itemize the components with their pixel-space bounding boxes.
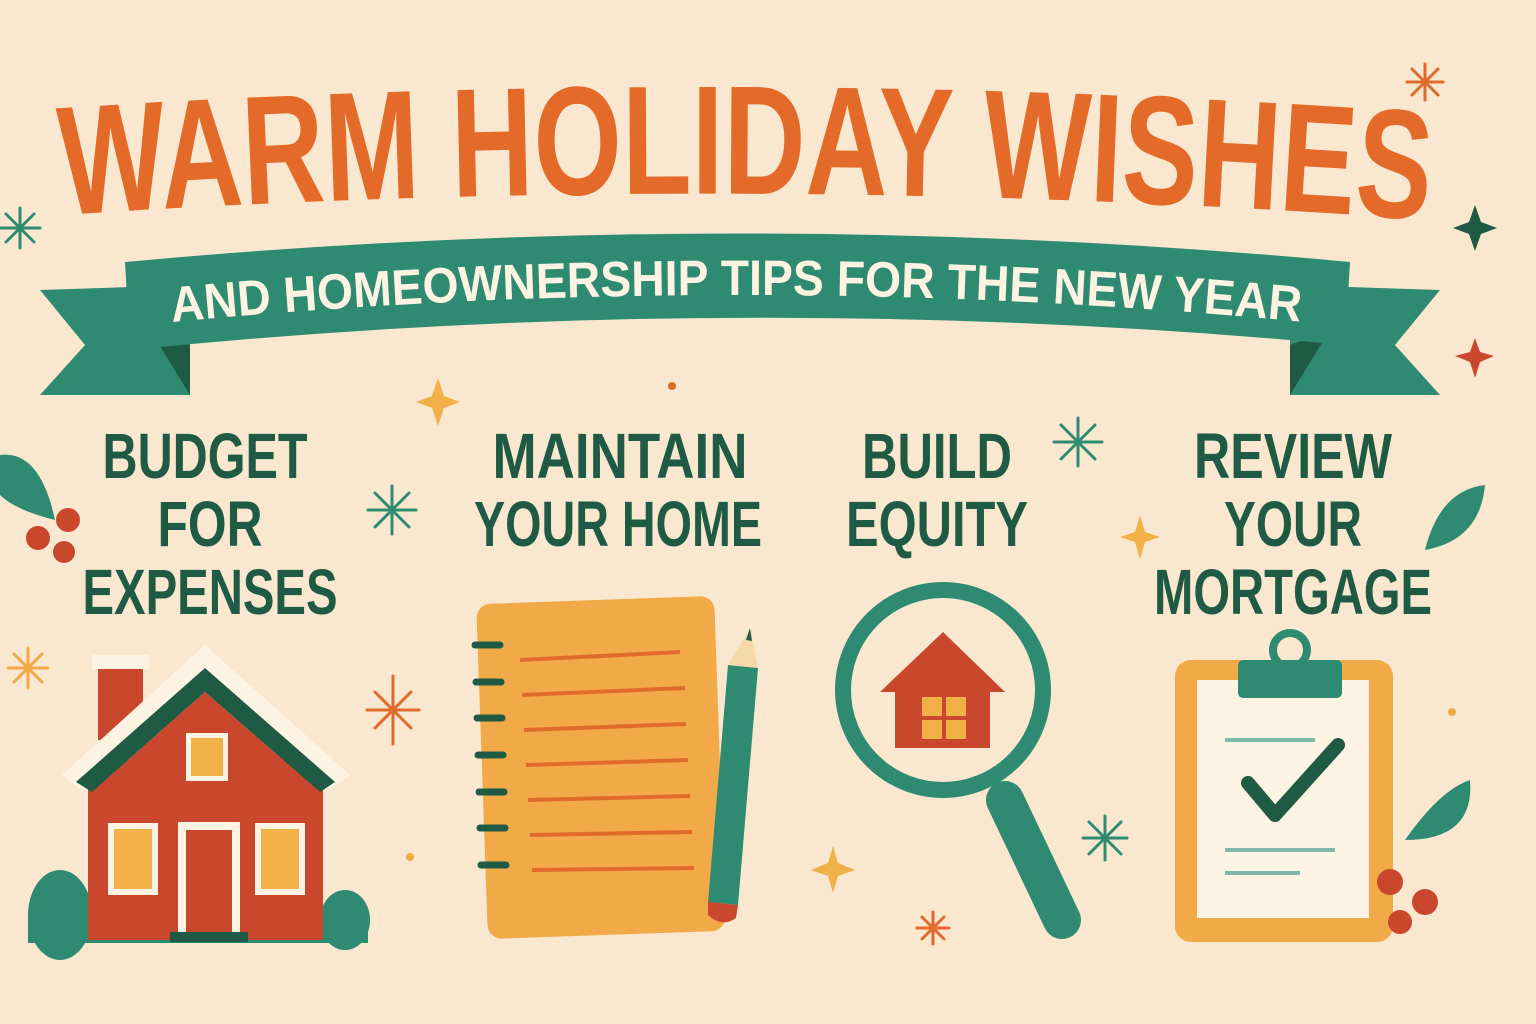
heading: budget	[82, 420, 338, 628]
heading: mortgage: REVIEW	[1194, 420, 1392, 492]
heading: equity	[846, 420, 1028, 560]
heading: maintain: MAINTAIN	[492, 420, 748, 492]
title: WARM HOLIDAY WISHES	[56, 86, 1428, 219]
heading: mortgage	[1154, 420, 1432, 628]
banner ribbon: AND HOMEOWNERSHIP TIPS FOR THE NEW YEAR	[173, 260, 1300, 322]
icon: clipboard	[1175, 633, 1393, 942]
banner ribbon	[40, 234, 1440, 395]
heading: budget: EXPENSES	[82, 556, 338, 628]
heading: mortgage: MORTGAGE	[1154, 556, 1432, 628]
heading: equity: BUILD	[862, 420, 1012, 492]
heading: budget: BUDGET	[102, 420, 308, 492]
heading: mortgage: YOUR	[1224, 488, 1362, 560]
heading: budget: FOR	[158, 488, 262, 560]
icon: house	[28, 645, 370, 960]
heading: equity: EQUITY	[846, 488, 1028, 560]
heading: maintain: YOUR HOME	[474, 488, 762, 560]
icon: magnifier	[843, 590, 1062, 920]
heading: maintain	[474, 420, 762, 560]
decorations: holly and berries	[0, 455, 1485, 934]
icon: notebook and pencil	[475, 596, 758, 939]
